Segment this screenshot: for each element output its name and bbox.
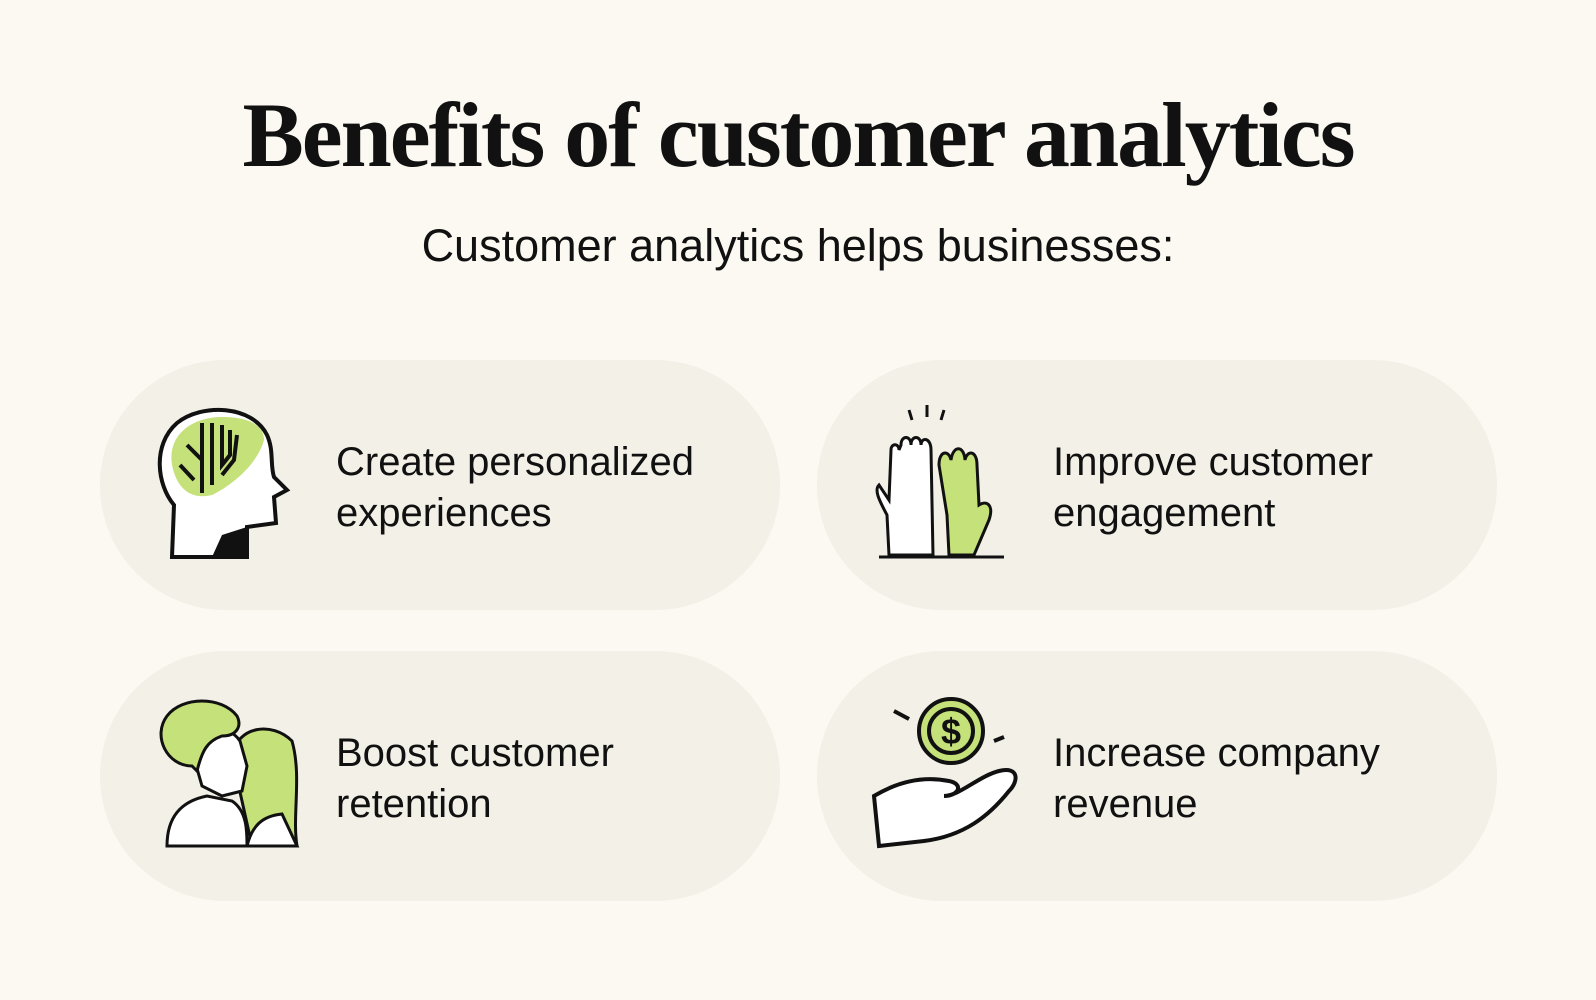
subtitle: Customer analytics helps businesses: bbox=[422, 220, 1174, 271]
text bbox=[1053, 440, 1373, 535]
icon: head with circuit brain bbox=[158, 408, 290, 559]
title: Benefits of customer analytics bbox=[242, 84, 1354, 186]
text: Boost customer bbox=[336, 731, 614, 775]
text: Improve customer bbox=[1053, 440, 1373, 484]
text: Increase company bbox=[1053, 731, 1380, 775]
icon: hand holding coin: $ bbox=[941, 711, 961, 752]
text bbox=[336, 731, 614, 826]
panel: personalized bbox=[100, 360, 780, 610]
icon: high five hands bbox=[876, 405, 1004, 558]
text: experiences bbox=[336, 491, 552, 535]
text bbox=[1053, 731, 1380, 826]
panel: engagement bbox=[817, 360, 1497, 610]
panel: revenue bbox=[817, 651, 1497, 901]
text: retention bbox=[336, 782, 492, 826]
icon: hand holding coin bbox=[872, 697, 1018, 848]
icon: two people bbox=[160, 700, 300, 848]
text: revenue bbox=[1053, 782, 1198, 826]
text bbox=[336, 440, 694, 535]
text: engagement bbox=[1053, 491, 1275, 535]
text: Create personalized bbox=[336, 440, 694, 484]
panel: retention bbox=[100, 651, 780, 901]
